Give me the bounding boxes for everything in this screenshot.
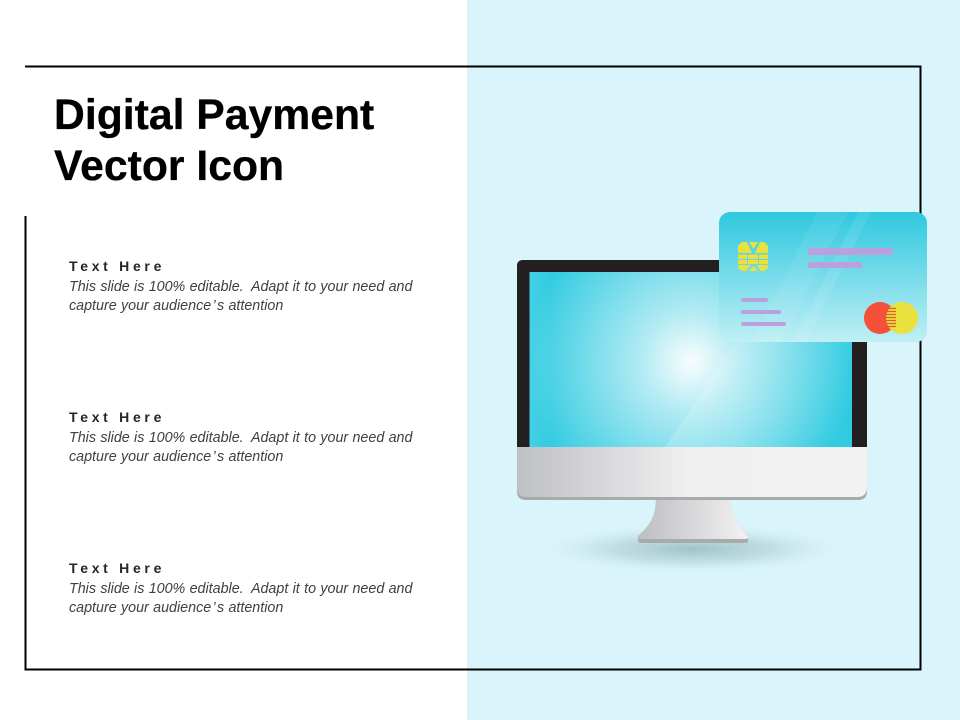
text block 3: capture your audience’s attention (69, 600, 283, 616)
card logo (864, 302, 918, 334)
title: Vector Icon (54, 142, 284, 190)
monitor body (517, 260, 867, 500)
text block 1: Text Here (69, 258, 165, 274)
text block 1 (69, 258, 413, 314)
text block 2: Text Here (69, 409, 165, 425)
monitor stand (638, 499, 748, 543)
text block 1: This slide is 100% editable. Adapt it to your need and (69, 279, 412, 295)
text block 2 (69, 409, 413, 464)
text block 3 (69, 560, 413, 616)
text block 1: capture your audience’s attention (69, 298, 283, 314)
text block 3: This slide is 100% editable. Adapt it to your need and (69, 581, 412, 597)
title: Digital Payment (54, 90, 374, 138)
card chip (738, 242, 768, 271)
text block 2: capture your audience’s attention (69, 448, 283, 464)
text block 3: Text Here (69, 560, 165, 576)
title (54, 90, 374, 190)
credit card (719, 212, 927, 342)
text block 2: This slide is 100% editable. Adapt it to your need and (69, 430, 412, 446)
card lower text bars (741, 298, 786, 326)
panel: light blue background (467, 0, 960, 720)
stand shadow (533, 524, 853, 574)
card top text bars (808, 248, 893, 268)
